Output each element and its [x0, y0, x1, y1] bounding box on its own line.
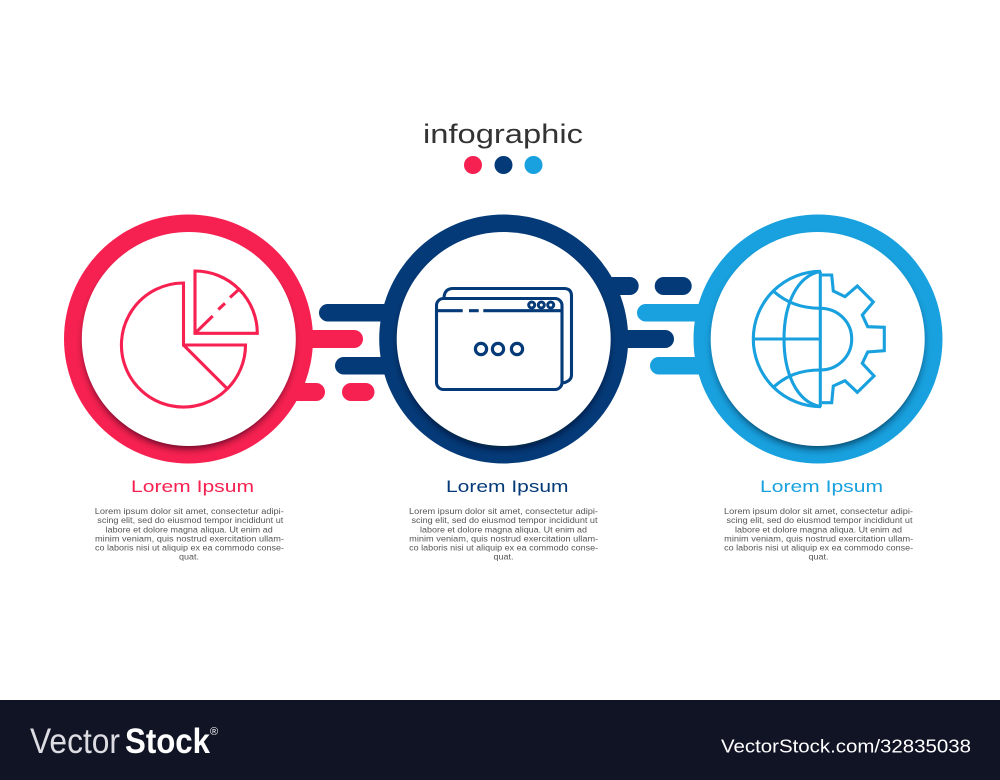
title [423, 119, 583, 174]
text block: column 3: quat. [808, 553, 828, 562]
heading: Lorem Ipsum red: Lorem Ipsum [131, 477, 254, 496]
connector bars: navy [319, 277, 692, 374]
text block: column 2: quat. [494, 553, 514, 562]
logo: VectorStock: ® [210, 726, 218, 738]
ring: navy [379, 214, 628, 464]
text block: column 2: minim veniam, quis nostrud exercitation ullam- [409, 534, 599, 543]
text block: column 1: quat. [179, 553, 199, 562]
text block: column 3: scing elit, sed do eiusmod tempor incididunt ut [726, 516, 913, 525]
text block: column 3: co laboris nisi ut aliquip ex ea commodo conse- [724, 543, 914, 552]
text block: column 2: Lorem ipsum dolor sit amet, consectetur adipi- [409, 507, 598, 516]
logo: VectorStock: Stock [125, 722, 210, 761]
text block: column 3: Lorem ipsum dolor sit amet, consectetur adipi- [724, 507, 913, 516]
text block: column 1: scing elit, sed do eiusmod tempor incididunt ut [97, 516, 284, 525]
text block: column 2: scing elit, sed do eiusmod tempor incididunt ut [412, 516, 598, 525]
ring: light blue [694, 214, 942, 464]
text block: column 1: minim veniam, quis nostrud exercitation ullam- [95, 534, 284, 543]
text block: column 2 [409, 507, 599, 562]
text block: column 1: Lorem ipsum dolor sit amet, consectetur adipi- [95, 507, 284, 516]
title: infographic [423, 119, 583, 149]
text block: column 3: labore et dolore magna aliqua. Ut enim ad [735, 525, 902, 534]
image id: VectorStock.com/32835038 [721, 736, 971, 757]
footer bar [0, 700, 1000, 780]
ring: red [64, 214, 313, 464]
panel: pie chart step [64, 214, 374, 562]
text block: column 2: co laboris nisi ut aliquip ex ea commodo conse- [409, 543, 599, 552]
icon: browser windows [436, 288, 572, 390]
text block: column 1: co laboris nisi ut aliquip ex ea commodo conse- [95, 543, 284, 552]
text block: column 1 [95, 507, 284, 562]
icon: pie chart [121, 271, 257, 407]
panel: global settings step [637, 214, 942, 562]
text block: column 3: minim veniam, quis nostrud exercitation ullam- [724, 534, 914, 543]
logo: VectorStock: Vector [30, 722, 120, 761]
heading: Lorem Ipsum navy: Lorem Ipsum [446, 477, 568, 496]
text block: column 3 [724, 507, 914, 562]
text block: column 2: labore et dolore magna aliqua. Ut enim ad [420, 525, 587, 534]
icon: globe with gear [753, 271, 884, 407]
connector bars: red [280, 330, 374, 401]
text block: column 1: labore et dolore magna aliqua. Ut enim ad [106, 525, 273, 534]
connector bars: light blue [637, 304, 720, 374]
heading: Lorem Ipsum light blue: Lorem Ipsum [760, 477, 883, 496]
panel: browser windows step [319, 214, 692, 562]
logo: VectorStock [30, 722, 218, 761]
